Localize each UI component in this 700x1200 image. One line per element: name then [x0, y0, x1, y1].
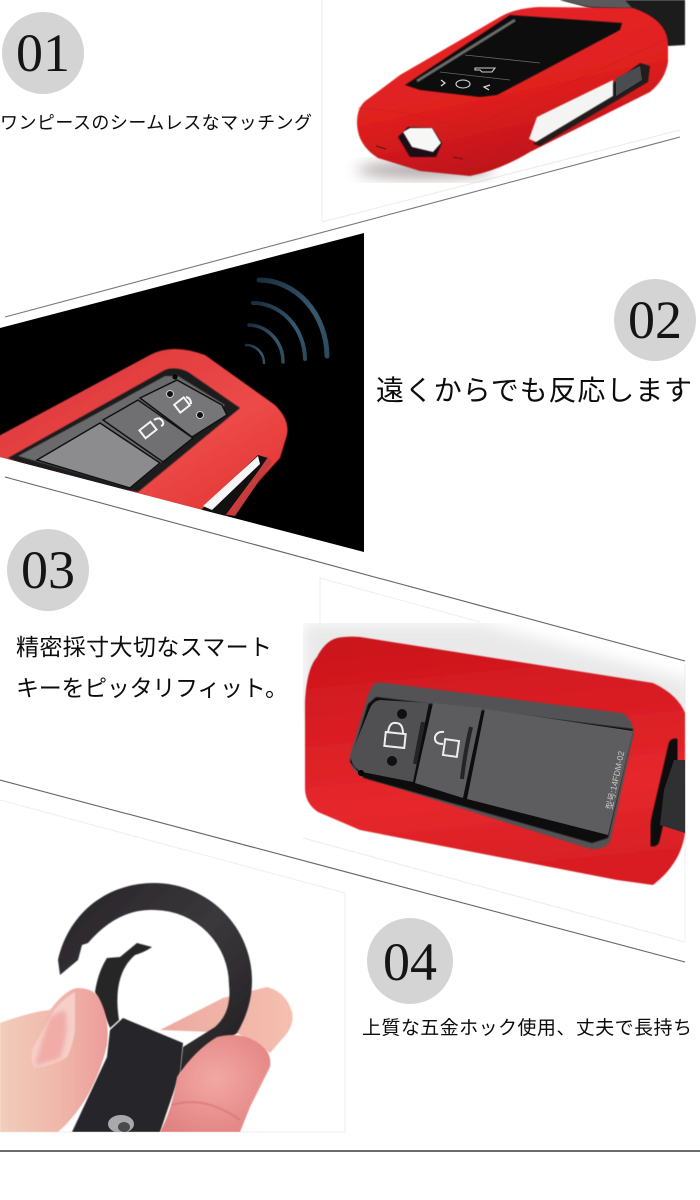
strap slot	[653, 745, 675, 840]
spring gate	[95, 943, 152, 1028]
caption 02: 遠くからでも反応します	[376, 375, 692, 406]
leather strap	[72, 1018, 183, 1132]
lock button	[140, 380, 227, 437]
side slot	[200, 455, 268, 516]
unlock button	[103, 400, 193, 462]
metal ring	[58, 883, 252, 1073]
large panel	[467, 709, 633, 835]
caption 03: 精密採寸大切なスマート	[16, 634, 272, 660]
badge 02: 02	[628, 290, 682, 350]
signal waves	[246, 280, 327, 363]
caption 03: キーをピッタリフィット。	[16, 675, 288, 701]
badge 04: 04	[383, 932, 437, 992]
side slot	[533, 63, 650, 146]
badge 03	[7, 529, 89, 611]
rivet	[108, 1115, 134, 1133]
badge 03: 03	[21, 540, 75, 600]
badge 02	[614, 279, 696, 361]
caption 04: 上質な五金ホック使用、丈夫で長持ち	[362, 1017, 692, 1039]
keyring hole	[398, 127, 442, 157]
caption 03	[16, 634, 288, 701]
thumb nail	[31, 992, 75, 1068]
lock button	[351, 700, 429, 782]
case body	[305, 637, 685, 885]
unlock button	[415, 703, 482, 798]
panel 3: front view of key case	[303, 578, 690, 942]
caption 01: ワンピースのシームレスなマッチング	[0, 113, 312, 133]
key screen	[405, 15, 622, 97]
bottom finger	[160, 1035, 270, 1132]
large button	[37, 423, 160, 488]
key strap	[560, 0, 685, 46]
panel 1: red key case photo	[322, 0, 685, 222]
badge 01: 01	[16, 23, 70, 83]
thumb and palm	[0, 988, 108, 1132]
panel 4: hand holding snap hook	[0, 800, 345, 1133]
badge 01	[2, 12, 84, 94]
key case body	[357, 7, 668, 176]
grey face	[350, 682, 634, 849]
red case	[0, 349, 288, 520]
panel 2: black photo with key and signal	[0, 233, 364, 552]
model text: 型号:14FDM-02	[604, 750, 626, 810]
back finger	[160, 987, 293, 1053]
grey face	[8, 368, 240, 492]
badge 04	[367, 918, 453, 1004]
